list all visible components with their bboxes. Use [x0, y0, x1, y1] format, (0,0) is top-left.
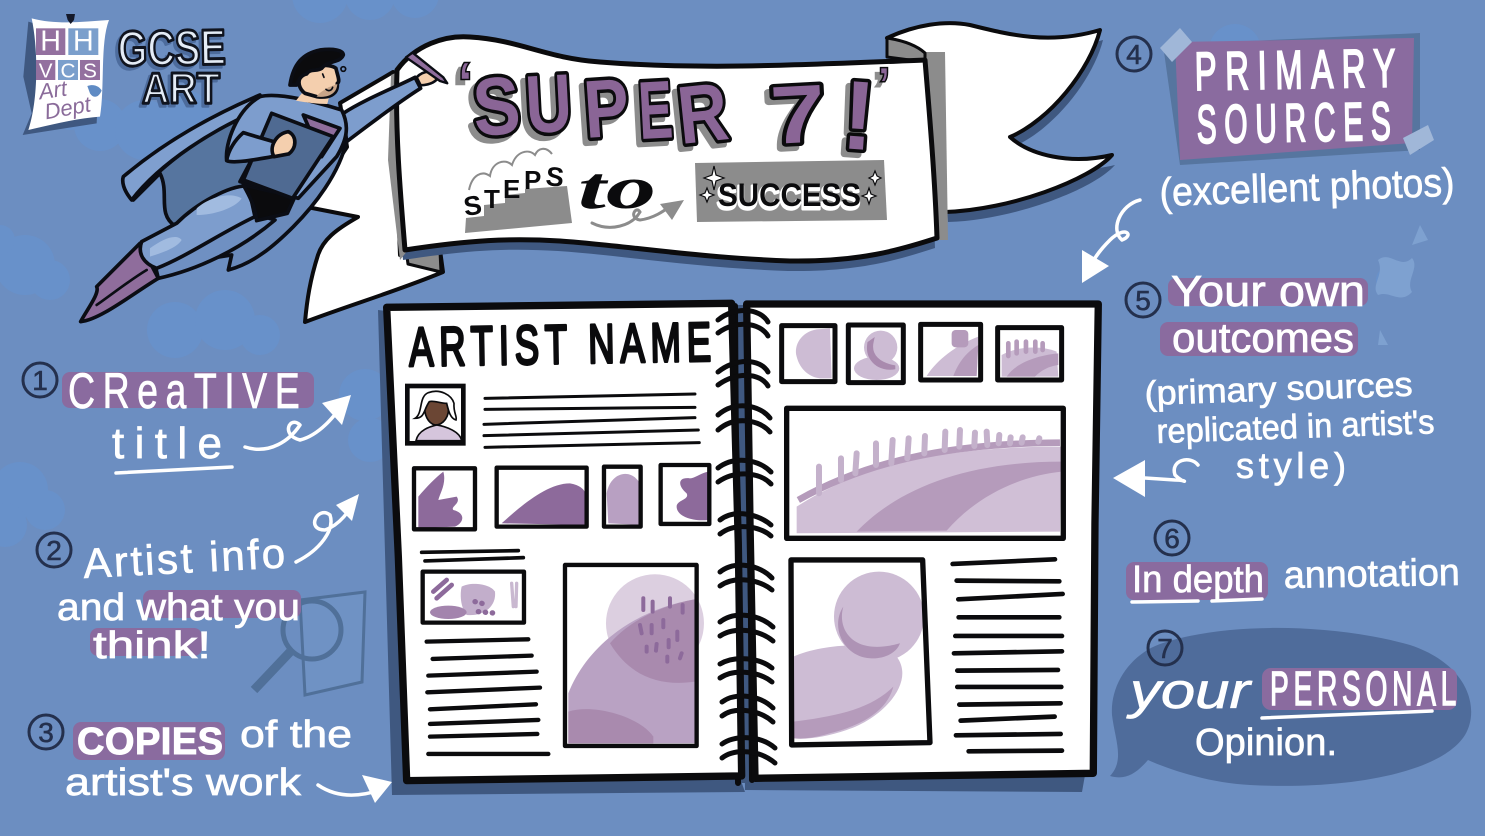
step 3: copies of work — [29, 714, 392, 804]
cape top — [123, 95, 267, 200]
number 7: 7 — [1157, 633, 1173, 664]
arrow: to success — [592, 200, 684, 227]
raised arm — [343, 77, 421, 142]
step 6: in depth annotation: In depth — [1132, 559, 1264, 601]
step 5: your own outcomes: Your own — [1171, 267, 1365, 316]
step 7: personal opinion bubble: Opinion. — [1195, 722, 1337, 764]
step 1: creative title: CReaTIVE — [68, 364, 307, 419]
annotation lines — [953, 559, 1063, 751]
paint splash — [1376, 225, 1428, 345]
title: Super 7!: U — [523, 56, 574, 151]
notebook spiral binding — [718, 310, 775, 763]
heading: GCSE ART: ART — [142, 64, 220, 113]
title: Super 7!: ! — [839, 59, 879, 171]
banner: main ribbon — [388, 37, 937, 271]
step 5: your own outcomes — [1113, 225, 1435, 497]
logo: HHVCS Art Dept note: H — [73, 26, 94, 58]
subtitle: success box — [695, 160, 887, 222]
step 5: your own outcomes: replicated in artist's — [1156, 403, 1435, 451]
logo: HHVCS Art Dept note — [23, 14, 109, 135]
title: Super 7!: S — [470, 60, 523, 154]
cape inner — [133, 100, 317, 226]
arrow to info — [296, 494, 359, 562]
step 4: primary sources: SOURCES — [1196, 92, 1399, 155]
number 5 — [1126, 283, 1160, 317]
number 2: 2 — [46, 535, 62, 566]
portfolio — [303, 115, 340, 157]
number 2 — [37, 533, 71, 567]
step 1: creative title: title — [112, 419, 222, 468]
character: flying superhero artist — [81, 49, 447, 322]
step 7: personal opinion bubble: your — [1126, 663, 1253, 719]
step 3: copies of work: artist's work — [65, 762, 302, 804]
wide artwork — [787, 408, 1063, 538]
banner: left tail — [305, 72, 443, 322]
number 7 — [1148, 631, 1182, 665]
briefs — [243, 185, 295, 221]
logo: HHVCS Art Dept note: Art — [35, 75, 69, 105]
step 6: in depth annotation: annotation — [1283, 552, 1460, 597]
artist bio lines — [484, 394, 699, 447]
hand on portfolio — [272, 132, 295, 157]
logo: HHVCS Art Dept note: S — [83, 59, 97, 82]
subtitle: success box: SUCCESS — [717, 179, 860, 216]
step 2: artist info: think! — [93, 625, 211, 667]
title: Super 7! — [457, 50, 891, 171]
step 3: copies of work: COPIES — [77, 721, 223, 763]
subtitle: to: to — [578, 155, 656, 221]
body text lines — [427, 639, 548, 754]
notebook: left page — [387, 303, 742, 781]
title: Super 7!: ‘ — [457, 50, 474, 117]
number 6: 6 — [1164, 523, 1180, 554]
step 4: primary sources: PRIMARY — [1194, 39, 1404, 102]
arrow to page — [1082, 200, 1140, 283]
step 2: artist info: Artist info — [82, 529, 286, 587]
number 1: 1 — [32, 365, 48, 396]
lower leg — [155, 213, 275, 278]
thumbnail row — [414, 465, 709, 529]
subtitle: steps: P — [524, 165, 541, 195]
subtitle: steps: S — [544, 161, 565, 193]
notebook spine — [733, 305, 752, 783]
logo: HHVCS Art Dept note: Dept — [43, 91, 93, 124]
step 6: in depth annotation — [1126, 521, 1460, 602]
arrow to outcomes — [1113, 460, 1198, 497]
subtitle: steps: S — [462, 190, 484, 222]
boots — [81, 243, 158, 322]
subtitle: steps: T — [484, 184, 500, 214]
magnifier icon — [254, 592, 365, 695]
step 2: artist info — [37, 494, 365, 695]
number 6 — [1155, 521, 1189, 555]
arrow to copies — [318, 775, 392, 803]
lower artwork — [791, 560, 930, 745]
neck — [296, 87, 330, 104]
title: Super 7!: 7 — [768, 68, 828, 162]
forearm — [227, 133, 277, 162]
hair — [290, 49, 343, 85]
title: Super 7!: E — [636, 64, 675, 157]
face — [299, 65, 339, 97]
artist name heading: ARTIST NAME — [408, 311, 717, 378]
thumbnail row — [782, 324, 1062, 383]
step 5: your own outcomes: outcomes — [1172, 314, 1354, 361]
number 4: 4 — [1126, 39, 1142, 70]
step 5: your own outcomes: style) — [1236, 445, 1346, 486]
step 5: your own outcomes: (primary sources — [1144, 366, 1413, 413]
step 3: copies of work: of the — [240, 714, 352, 756]
step 4: primary sources — [1082, 28, 1455, 283]
step 2: artist info: and what you — [57, 587, 300, 629]
subtitle: steps — [462, 149, 572, 233]
subtitle: success box: SUCCESS — [718, 177, 861, 213]
step 7: personal opinion bubble — [1110, 628, 1471, 786]
upper leg — [140, 186, 255, 268]
number 5: 5 — [1135, 285, 1151, 316]
subtitle: steps: E — [503, 174, 520, 204]
title: Super 7!: R — [673, 66, 732, 162]
title: Super 7!: ’ — [877, 57, 891, 113]
notebook shadow — [740, 300, 1085, 792]
step 1: creative title — [23, 363, 351, 473]
arrow to title — [245, 395, 351, 449]
torso — [226, 95, 346, 198]
caption lines — [422, 551, 523, 561]
artist portrait — [407, 386, 463, 443]
step 4: primary sources: (excellent photos) — [1159, 161, 1455, 215]
notebook left shadow — [378, 310, 745, 795]
number 3: 3 — [38, 717, 54, 748]
pencil — [406, 53, 447, 83]
small artwork — [423, 572, 524, 623]
notebook: right page — [747, 304, 1098, 778]
step 7: personal opinion bubble: PERSONAL — [1270, 662, 1461, 716]
logo: HHVCS Art Dept note: C — [61, 59, 76, 82]
heading: GCSE ART — [117, 19, 226, 113]
number 3 — [29, 715, 63, 749]
logo: HHVCS Art Dept note: V — [39, 59, 53, 82]
number 4 — [1117, 37, 1151, 71]
logo: HHVCS Art Dept note: H — [40, 26, 61, 58]
title: Super 7!: P — [581, 61, 632, 155]
large artwork — [565, 565, 704, 746]
banner: right tail — [887, 23, 1115, 240]
drawing hand — [417, 71, 439, 85]
heading: GCSE ART: GCSE — [117, 19, 226, 77]
number 1 — [23, 363, 57, 397]
lower cape — [200, 140, 347, 270]
